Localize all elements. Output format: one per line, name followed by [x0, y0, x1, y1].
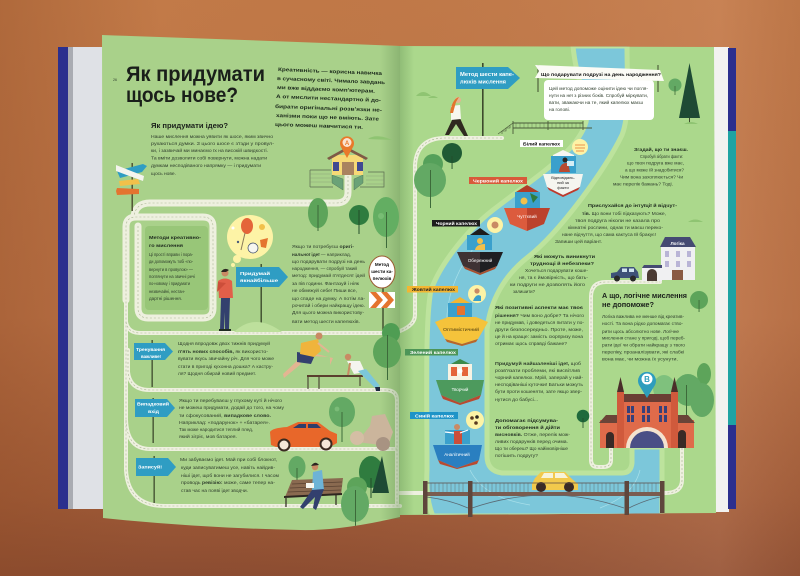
- text block: five new ways: [178, 340, 275, 376]
- text block: listen to intuition: [555, 202, 678, 244]
- panel: creative thinking methods: Ці прості вправи і пора-: [149, 252, 193, 257]
- text block: idea: Та вміти дозволити собі повернути, можна надати: [151, 156, 268, 160]
- text block: random word: який зігріє, мов батарея.: [179, 433, 237, 439]
- sign: come up with as many as possible: якнайбільше: [240, 278, 279, 283]
- text block: remember what you know: Згадай, що ти знаєш.: [634, 146, 688, 152]
- panel: creative thinking methods: незвичайні, нестан-: [149, 288, 185, 294]
- text block: craziest ideas: чорний капелюх. Мрій, заперай у най-: [495, 374, 584, 380]
- panel: gift question: Цей метод допоможе оцінити ідею чи погля-: [549, 85, 649, 91]
- boat: white hat: Відповідаль-: [551, 175, 575, 180]
- sign: write down: [136, 456, 176, 503]
- trees behind castle: [653, 374, 702, 415]
- panel: gift question: вати, зважаючи на те, який капелюх маєш: [549, 99, 643, 105]
- text block: notebook: став час на появі ідеї зводчи.: [181, 488, 248, 493]
- label: red hat: Червоний капелюх: [473, 178, 524, 183]
- intro text: бирати оригінальні розв'язки не-: [275, 103, 382, 114]
- panel: creative thinking methods: ди допоможуть тобі «по-: [149, 259, 193, 264]
- title: Як придумати: [126, 63, 265, 86]
- title: щось нове?: [126, 84, 238, 107]
- text block: positive aspects: рішення? Чим воно добре? Та нічого: [495, 313, 585, 318]
- text block: five new ways: ля? Щодня обирай новий предмет.: [178, 370, 256, 376]
- text block: idea: ки, і зазвичай ми минаємо їх на високій швидкості.: [151, 147, 268, 153]
- sign: six hats method: Метод: [375, 262, 389, 267]
- label: blue hat: Синій капелюх: [415, 413, 455, 418]
- text block: original idea: що подарувати подрузі на день: [292, 259, 366, 264]
- text block: remember what you know: [613, 146, 688, 186]
- text block: five new ways: Щодня впродовж двох тижнів придумуй: [178, 340, 271, 346]
- label: white hat: [520, 140, 563, 147]
- text block: craziest ideas: нутися до бабусі...: [495, 397, 538, 402]
- text block: summarise: ти обговорення й дійти: [495, 424, 560, 430]
- winding road: [126, 138, 682, 506]
- text block: craziest ideas: [495, 360, 584, 402]
- text block: logic: ності. Та вона рідко допомагає ство-: [602, 321, 684, 326]
- trees bottom left page: [341, 456, 389, 528]
- label: red hat: [469, 177, 527, 184]
- figure: runner: [283, 332, 333, 378]
- panel: gift question: [535, 65, 664, 120]
- boat: blue hat: Аналітичний: [444, 452, 470, 457]
- trees top left page: [308, 197, 399, 248]
- text block: difficulties: [510, 254, 595, 294]
- text block: remember what you know: Спробуй зібрати факти:: [640, 153, 683, 159]
- text block: five new ways: п'ять нових способів, як використо-: [178, 348, 269, 354]
- text block: logic: [602, 314, 686, 362]
- boat: white hat: [543, 139, 588, 197]
- sign: six hats method: шести ка-: [371, 269, 393, 274]
- text block: listen to intuition: твоя подруга ніколи не казала про: [575, 218, 661, 223]
- label: black hat: Чорний капелюх: [436, 221, 478, 226]
- text block: five new ways: вувати якусь звичайну річ. Для чого може: [178, 355, 275, 361]
- label: yellow hat: Жовтий капелюх: [411, 287, 456, 292]
- text block: original idea: за пів години. Фантазуй і ніяк: [292, 280, 359, 286]
- hill decorative blob: [368, 136, 392, 140]
- text block: original idea: метод: придумай п'ятдесят ідей: [292, 272, 366, 278]
- building: logic: Логіка: [670, 241, 685, 246]
- text block: listen to intuition: нане відчуття, що сама кактуса їй бракує!: [562, 231, 656, 237]
- text block: notebook: куди записуватимеш усе, навіть найдив-: [181, 464, 276, 470]
- sign: six hats thinking: люхів мислення: [460, 80, 506, 86]
- panel: gift question: нути на неї з різних боків. Спробуй міркувати,: [549, 92, 648, 98]
- text block: craziest ideas: Придумуй найшаленіші ідеї, щоб: [495, 360, 581, 366]
- figure: thinking man: [217, 269, 233, 331]
- text block: craziest ideas: розв'язати проблеми, які висвітлив: [495, 368, 581, 373]
- intro text: ханізми поки що не вміють. Зате: [276, 113, 379, 123]
- sign: training: [134, 340, 173, 387]
- text block: notebook: ніші ідеї, щоб вони не загубилися. І часом: [181, 473, 279, 478]
- text block: idea: думкам несподіваного напрямку — і придумати: [151, 163, 262, 168]
- text block: positive aspects: отримає щось справді бажане?: [495, 341, 568, 346]
- text block: random word: Так може народитися теплий плед,: [179, 426, 253, 432]
- text block: craziest ideas: несподіваніші куточки! Батьки можуть: [495, 382, 584, 387]
- sign: six hats method: [369, 256, 395, 330]
- text block: positive aspects: други безпосередньо. Проте, може,: [495, 327, 583, 332]
- footbridge: [498, 121, 592, 134]
- text block: random word: не можеш придумати, додай до того, на чому: [179, 404, 285, 410]
- icon: school house A: [310, 136, 384, 190]
- boat: yellow hat: Оптимістичний: [443, 327, 480, 332]
- text block: original idea: Для цього можна використову-: [292, 310, 365, 315]
- spine shading: [380, 46, 414, 519]
- icon: thought bubble with ideas: [227, 215, 273, 267]
- castle B: В: [644, 375, 650, 384]
- left page: [102, 35, 400, 530]
- river: [427, 46, 662, 516]
- label: green hat: [405, 349, 458, 356]
- panel: creative thinking methods: по-новому і придумати: [149, 281, 190, 286]
- text block: listen to intuition: Прислухайся до інтуїції й відчут-: [588, 202, 678, 208]
- text block: original idea: Якщо ти потребуєш оригі-: [292, 244, 355, 249]
- text block: remember what you know: що твоя подруга вже має,: [627, 160, 684, 166]
- text block: difficulties: залишити?: [513, 289, 535, 294]
- text block: idea: щось нове.: [151, 171, 176, 176]
- heading: idea: Як придумати ідею?: [151, 122, 228, 130]
- figure: walking woman: [445, 97, 468, 136]
- page number left: 26: [113, 78, 117, 82]
- rocks and tree: [329, 397, 393, 451]
- text block: original idea: не обмежуй себе! Пиши все,: [292, 287, 357, 293]
- text block: positive aspects: це й на краще: замість сюрпризу вона: [495, 333, 584, 339]
- sign: write down: Записуй!: [138, 464, 163, 470]
- text block: logic: Логіка важлива не менше від креатив-: [602, 314, 685, 319]
- title: [126, 63, 265, 107]
- text block: idea: [151, 134, 275, 176]
- intro text: [275, 67, 385, 131]
- figure: man on bench: [284, 463, 343, 510]
- sign: random entry: [135, 398, 175, 443]
- panel: creative thinking methods: поглянути на звичні речі: [149, 274, 195, 279]
- boat: red hat: Чуттєвий: [517, 213, 537, 219]
- label: blue hat: [410, 412, 458, 419]
- sign: random entry: вхід: [148, 409, 159, 414]
- text block: craziest ideas: бути проти кошеняти, зате якщо звер-: [495, 389, 583, 394]
- sign: training: важливе!: [141, 354, 162, 359]
- text block: summarise: потішить подругу?: [495, 453, 539, 458]
- boat: black hat: Обережний: [468, 257, 493, 263]
- icon: school house A: А: [345, 141, 350, 147]
- text block: difficulties: Які можуть виникнути: [534, 254, 595, 259]
- text block: logic: вона має, чи можна їх усунути.: [602, 356, 678, 362]
- sign: come up with as many as possible: Придумай: [240, 271, 270, 276]
- text block: summarise: ливих подарунків перед очима.: [495, 439, 568, 444]
- text block: idea: Наше мислення можна уявити як шосе, яким звично: [151, 134, 274, 139]
- text block: original idea: рочитай і обери найкращу ідею.: [292, 302, 365, 308]
- text block: logic: рати ідеї чи обрати найкращу з твого: [602, 342, 686, 348]
- label: white hat: Білий капелюх: [523, 141, 561, 146]
- text block: notebook: Ми забуваємо ідеї. Май при собі блокнот,: [180, 456, 277, 462]
- trees top right page: [414, 63, 700, 208]
- small dark tree: [577, 410, 589, 428]
- sign: come up with as many as possible: [236, 264, 288, 332]
- text block: logic: рити щось абсолютно нове. Логічне: [602, 329, 680, 334]
- text block: original idea: [292, 244, 366, 324]
- text block: remember what you know: має перелік бажань? Тоді.: [613, 182, 673, 186]
- text block: summarise: висновків. Отже, перелік мож-: [495, 432, 571, 437]
- boat: black hat: [457, 217, 503, 275]
- boat: yellow hat: [435, 285, 488, 346]
- intro text: в сучасному світі. Чимало завдань: [277, 76, 385, 86]
- sign: six hats method: пелюхів: [373, 276, 392, 281]
- text block: random word: Якщо ти перебуваєш у глухому куті й нічого: [179, 397, 283, 403]
- text block: positive aspects: [495, 305, 585, 346]
- panel: creative thinking methods: [145, 226, 208, 310]
- icon: jeep: [611, 267, 639, 282]
- text block: idea: рухаються думки. З цього шосе є з'їзди у провул-: [151, 141, 275, 146]
- boat: blue hat: [433, 411, 484, 469]
- text block: difficulties: труднощі й небезпеки?: [530, 260, 594, 266]
- text block: logic: переліку, проаналізувати, які слабкі: [602, 350, 684, 354]
- panel: creative thinking methods: го мислення: [149, 243, 183, 248]
- building: logic: [642, 237, 696, 281]
- text block: positive aspects: не придумав, і доведеться питати у по-: [495, 320, 585, 325]
- text block: notebook: [180, 456, 279, 493]
- text block: listen to intuition: кімнатні рослини, однак ти маєш переко-: [568, 225, 664, 230]
- intro text: А от мислити нестандартно й до-: [276, 93, 381, 104]
- boat: green hat: Творчий: [452, 387, 469, 392]
- text block: remember what you know: Чим вона захоплюється? Чи: [620, 174, 684, 180]
- figure: bench and push-ups: [307, 354, 380, 391]
- text block: five new ways: стати в пригоді кухонна дошка? А кастру-: [178, 364, 274, 369]
- heading: logic: [602, 291, 687, 309]
- text block: logic: мислення стане у пригоді, щоб переб-: [602, 336, 686, 340]
- text block: random word: ти сфокусований, випадкове слово.: [179, 412, 271, 418]
- hill and trees right edge: [688, 220, 714, 417]
- text block: remember what you know: а що може їй знадобитися?: [625, 166, 685, 172]
- text block: random word: Наприклад: «подарунок» + «батарея».: [179, 420, 270, 425]
- sign: random entry: Випадковий: [137, 402, 169, 406]
- boat: red hat: [504, 185, 550, 231]
- panel: creative thinking methods: дартні рішення.: [149, 296, 182, 301]
- castle B: [599, 372, 695, 448]
- panel: creative thinking methods: Методи креативно-: [149, 235, 202, 240]
- intro text: цього можеш навчитися ти.: [275, 122, 364, 131]
- right page: [400, 46, 716, 515]
- text block: original idea: народження, — спробуй такий: [292, 265, 357, 271]
- heading: logic: А що, логічне мислення: [602, 291, 687, 300]
- tree right of runner: [373, 323, 401, 380]
- text block: notebook: проводь ревізію: може, саме тепер на-: [181, 480, 276, 485]
- intro text: Креативність — корисна навичка: [278, 67, 382, 77]
- text block: listen to intuition: Запиши цей варіант.: [555, 238, 602, 244]
- sign: six hats thinking: Метод шести капе-: [460, 72, 514, 78]
- tree behind bench: [288, 456, 306, 492]
- hill blob: [234, 322, 282, 332]
- text block: positive aspects: Які позитивні аспекти має твоє: [495, 305, 583, 310]
- text block: difficulties: ки подруги не дозволять його: [510, 281, 586, 287]
- icon: orange car: [270, 422, 337, 450]
- text block: summarise: Що ти обереш? Що найімовірніше: [495, 445, 569, 451]
- boat: white hat: ний за: [557, 180, 570, 185]
- text block: original idea: що спаде на думку. А потім ла-: [292, 296, 366, 301]
- text block: original idea: вати метод шести капелюхів.: [292, 319, 360, 324]
- text block: original idea: нальної ідеї — наприклад,: [292, 252, 351, 257]
- sign: six hats thinking: [456, 63, 520, 136]
- text block: summarise: Допомагає підсумува-: [495, 418, 559, 423]
- boat: white hat: факти: [557, 185, 569, 190]
- heading: logic: не допоможе?: [602, 300, 654, 309]
- text block: random word: [179, 397, 285, 439]
- label: green hat: Зелений капелюх: [410, 350, 457, 355]
- boat: green hat: [436, 359, 484, 405]
- text block: listen to intuition: тів. Що вони тобі підказують? Може,: [582, 211, 666, 216]
- label: black hat: [432, 220, 480, 226]
- icon: signpost with arrows: [116, 163, 147, 211]
- intro text: ми вже віддаємо комп'ютерам.: [277, 85, 376, 95]
- text block: summarise: [495, 418, 571, 458]
- text block: difficulties: ня, та є ймовірність, що бать-: [519, 274, 589, 280]
- panel: creative thinking methods: вернути в провулок» —: [149, 267, 193, 272]
- panel: gift question: Що подарувати подрузі на день народження?: [541, 72, 661, 78]
- sign: training: Тренування: [136, 347, 165, 352]
- icon: yellow car on bridge: [532, 472, 578, 492]
- label: yellow hat: [407, 286, 458, 292]
- book cover and page edges: [58, 47, 736, 512]
- road bridge: [423, 481, 664, 517]
- text block: difficulties: Хочеться подарувати коше-: [525, 268, 589, 273]
- panel: gift question: на голові.: [549, 107, 570, 112]
